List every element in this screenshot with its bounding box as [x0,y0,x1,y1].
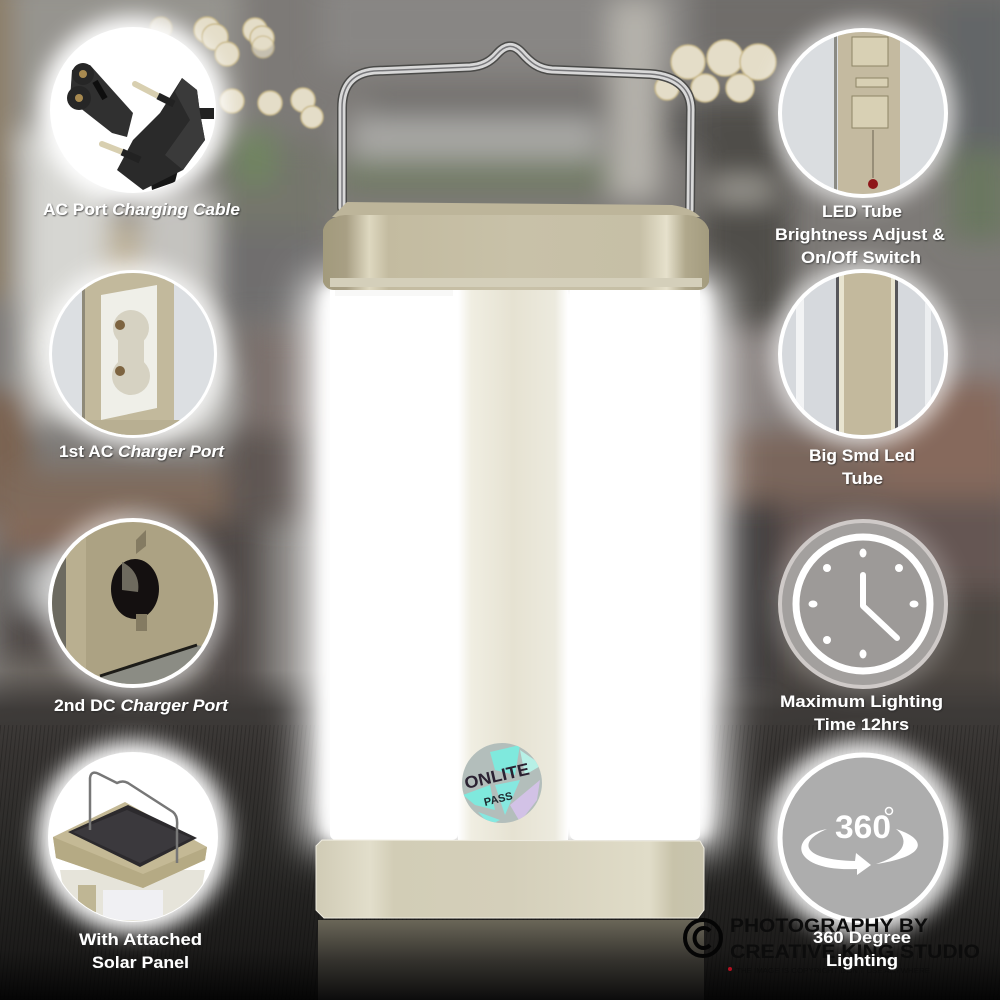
label: 360 degree lighting: Lighting [826,951,898,970]
label: with attached solar panel: With Attached [79,930,202,949]
label: maximum lighting time: Maximum Lighting [780,692,943,711]
label: 360 degree lighting [813,928,911,970]
icon: solar panel top [53,773,207,930]
tube highlight [335,290,453,296]
bokeh lights [150,17,776,128]
feature: brightness adjust switch [771,21,955,205]
label: big SMD LED tube: Big Smd Led [809,446,915,465]
lantern glow [305,275,725,850]
label: 2nd DC charger port: 2nd DC Charger Port [54,696,229,715]
label: big SMD LED tube [809,446,915,488]
copyright mark [685,920,721,956]
feature: AC port charging cable [39,16,227,204]
bottom cap [316,840,704,918]
centre column [458,284,568,840]
feature: big SMD LED tube [771,262,955,446]
watermark: CREATIVE KING STUDIO [730,942,980,963]
icon: AC socket [48,270,218,440]
label: maximum lighting time [780,692,943,734]
label: big SMD LED tube: Tube [842,469,883,488]
label: 1st AC charger port: 1st AC Charger Port [59,442,225,461]
lantern handle [342,46,691,210]
icon: 360 rotation arrow: 360 [835,809,891,845]
feature: 360 degree lighting [765,740,961,936]
icon: plug and cable [67,63,214,190]
label: brightness adjust and on/off switch: Brightness Adjust & [775,225,945,244]
wooden floor [0,670,1000,1000]
sticker brand text: ONLITE [463,760,531,793]
icon: switch strip with red LED [778,30,948,200]
sticker pass text: PASS [483,790,514,809]
icon: DC port hole [52,522,214,684]
icon: 360 rotation arrow [801,808,918,875]
lower reflection [318,920,704,1000]
watermark text: PHOTOGRAPHY BY [730,916,928,937]
top cap [323,202,709,290]
lantern [316,46,709,1000]
label: brightness adjust and on/off switch: LED Tube [822,202,902,221]
icon: clock [796,537,930,671]
feature: attached solar panel [37,741,229,933]
label: with attached solar panel [79,930,202,972]
feature: maximum lighting time [771,512,955,696]
label: AC port charging cable: AC Port Charging Cable [43,200,240,219]
feature: 1st AC charger port [41,262,225,446]
right light tube [570,284,700,840]
label: 360 degree lighting: 360 Degree [813,928,911,947]
icon: LED tube strip [778,270,948,440]
label: maximum lighting time: Time 12hrs [814,715,909,734]
watermark [685,916,980,975]
label: brightness adjust and on/off switch [775,202,945,267]
feature: 2nd DC charger port [41,511,225,695]
label: with attached solar panel: Solar Panel [92,953,189,972]
hologram sticker [462,743,542,825]
watermark note: THE IMAGE IS COPYRIGHT DON'T USE ANYWHERE [736,968,930,975]
left light tube [330,284,458,840]
label: brightness adjust and on/off switch: On/Off Switch [801,248,921,267]
